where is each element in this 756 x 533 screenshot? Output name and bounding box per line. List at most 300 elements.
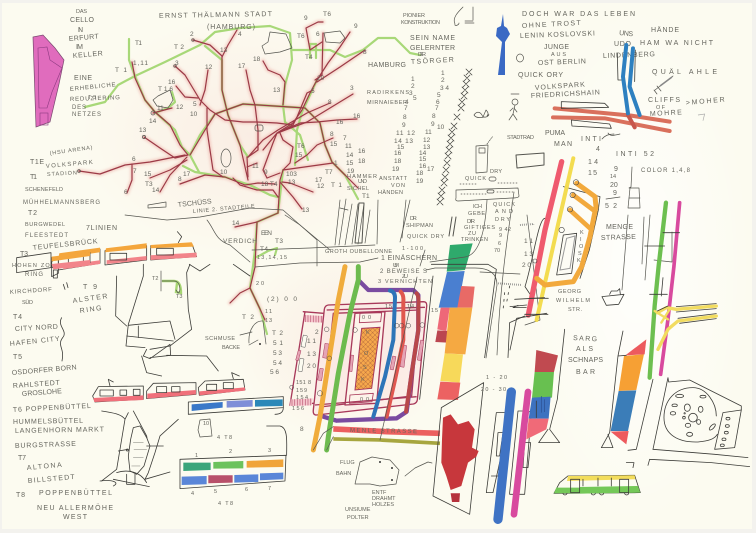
text: quick and dry: AND bbox=[495, 209, 513, 215]
text: tschüss linie bbox=[177, 197, 255, 215]
station labels: 159 bbox=[296, 388, 307, 394]
number columns: 5 bbox=[437, 92, 441, 99]
text: puma man inti: 4 bbox=[596, 146, 600, 153]
text: eine erhebliche reduzierung: ERHEBLICHE bbox=[70, 82, 116, 93]
number columns: 19 bbox=[416, 178, 424, 185]
button numbers: 6 bbox=[245, 487, 248, 493]
map labels: 13 bbox=[288, 179, 296, 186]
text: puma man inti: INTI 52 bbox=[616, 151, 654, 158]
diagram: river with bridges bbox=[100, 411, 178, 487]
map labels: T6 bbox=[297, 143, 305, 150]
panel: seven coloured buttons bbox=[180, 426, 287, 489]
text: stations t1 t2: 7LINIEN bbox=[86, 225, 117, 232]
text: eine erhebliche reduzierung: NETZES bbox=[72, 112, 101, 118]
map labels: 11 bbox=[252, 163, 259, 170]
lower right: green magenta with yellow roads bbox=[645, 203, 716, 378]
text: das cello: IN bbox=[78, 27, 83, 34]
map labels: 18 bbox=[358, 158, 366, 165]
text: stations t1 t2: T1E bbox=[30, 159, 44, 166]
labels: t2 station numbers: 13 bbox=[265, 318, 272, 324]
station labels: K bbox=[366, 330, 370, 336]
text: stations t4 to t8: KIRCHDORF bbox=[10, 287, 52, 296]
station labels: 2 bbox=[315, 329, 319, 336]
text: das cello: CELLO bbox=[70, 17, 95, 24]
side platform bbox=[290, 312, 323, 406]
text: stations t1 t2: (HSU ARENA) bbox=[49, 145, 93, 157]
pink frame bbox=[313, 302, 427, 415]
text: das cello: IM bbox=[76, 44, 83, 51]
number columns: 3 4 bbox=[440, 85, 449, 92]
text: stations t4 to t8: ALTONA bbox=[27, 462, 62, 472]
map labels: 16 bbox=[353, 113, 361, 120]
diagram: hatched track bbox=[335, 199, 406, 245]
station labels: 0 0 bbox=[360, 397, 369, 403]
text: quick and dry: TRINKEN bbox=[461, 237, 488, 243]
text: groth oubellonne: 1-100 bbox=[402, 246, 423, 252]
map labels: T2 bbox=[174, 44, 184, 51]
text: eine erhebliche reduzierung: T3 bbox=[88, 95, 96, 101]
text: doch war das leben: FRIEDRICHSHAIN bbox=[531, 89, 600, 100]
road outlines bbox=[125, 208, 378, 267]
text: stations t4 to t8: BURGSTRASSE bbox=[15, 441, 76, 450]
text: stations t4 to t8: GROSLOHE bbox=[22, 388, 62, 398]
text: groth oubellonne: 2 BEWEISE S bbox=[380, 269, 427, 275]
icon: ship bbox=[602, 289, 624, 305]
text: groth oubellonne: 1 EINÄSCHERN bbox=[381, 254, 437, 262]
map labels: 18 T4 bbox=[261, 181, 278, 188]
number columns: 4 bbox=[405, 99, 409, 106]
map labels: 8 bbox=[363, 49, 367, 56]
labels: t2 station numbers: T3 bbox=[275, 238, 283, 245]
text: stations t1 t2: T1 bbox=[30, 174, 37, 181]
plan: flug bahn and ent atelier bbox=[336, 457, 432, 521]
text: groth oubellonne: UM bbox=[393, 263, 399, 269]
map labels: 14 bbox=[149, 118, 157, 125]
text: stations t4 to t8: T7 bbox=[18, 455, 26, 462]
map labels: 12 bbox=[176, 104, 184, 111]
text: hände: HAM WA NICHT bbox=[640, 40, 714, 47]
labels: t2 station numbers: 54 bbox=[273, 360, 282, 367]
text: stations t1 t2 bbox=[12, 145, 117, 278]
pink wash along lines bbox=[79, 22, 365, 320]
text: stations t1 t2: RING bbox=[25, 272, 43, 278]
text: puma man inti bbox=[507, 130, 691, 242]
text: sein name gelernter bbox=[401, 13, 455, 66]
map labels: 13 bbox=[220, 47, 228, 54]
blue and magenta strips bbox=[486, 392, 531, 519]
number columns: 1 bbox=[441, 70, 445, 77]
map labels: 14 bbox=[232, 220, 240, 227]
text: quick and dry bbox=[406, 169, 515, 254]
icon: tool sketches bbox=[454, 7, 474, 26]
title bbox=[159, 10, 273, 31]
map labels: 16 bbox=[358, 148, 366, 155]
text: hände: >MOHER bbox=[686, 97, 725, 107]
text: sein name gelernter: PIONIER bbox=[403, 13, 425, 19]
icon: green t2 t3 branch: T3 bbox=[176, 294, 182, 300]
text: sarg als schnaps bar: ALS bbox=[576, 346, 593, 353]
text: puma man inti: MAN bbox=[554, 141, 572, 148]
map labels: 17 bbox=[315, 177, 323, 184]
text: doch war das leben: LENIN KOSLOVSKI bbox=[520, 30, 595, 40]
text: eine erhebliche reduzierung bbox=[70, 75, 120, 118]
text: sarg als schnaps bar: SARG bbox=[573, 335, 597, 343]
label: schmuse backe bbox=[205, 321, 266, 351]
station labels: 20 bbox=[307, 363, 316, 370]
station labels: 15 bbox=[385, 304, 392, 310]
map labels: 8 bbox=[178, 176, 182, 183]
text: puma man inti: INTI bbox=[581, 136, 601, 143]
labels near kiosk: 13 bbox=[524, 251, 533, 258]
station labels: 11 bbox=[307, 338, 316, 345]
text: quick and dry: 70 bbox=[494, 248, 500, 254]
diagram: roundabout park bbox=[626, 378, 750, 468]
map labels: 1 bbox=[334, 160, 338, 167]
map labels: T1 bbox=[135, 40, 142, 47]
text: hände: UDO bbox=[614, 41, 632, 48]
text: puma man inti: STADTRAD bbox=[507, 135, 534, 141]
number columns: 9 bbox=[431, 121, 435, 128]
labels near kiosk bbox=[522, 230, 590, 313]
text: quick and dry: QUICK bbox=[465, 176, 486, 182]
title: ERNST THÄLMANN STADT bbox=[159, 10, 273, 20]
text: hände: UNS bbox=[619, 30, 634, 38]
text: quick and dry: ICH bbox=[473, 204, 482, 210]
map labels: 8 bbox=[328, 99, 332, 106]
text: stations t4 to t8: OSDORFER BORN bbox=[12, 364, 77, 377]
station labels: 151 8 bbox=[296, 380, 311, 386]
text: stations t1 t2: FLEESTEDT bbox=[25, 233, 68, 239]
plan: flug bahn and ent atelier: UNSIUME bbox=[345, 507, 371, 513]
map labels: T1 bbox=[331, 182, 342, 189]
text: hamburg column: ANSTATT bbox=[379, 176, 408, 182]
text: doch war das leben: JUNGE bbox=[544, 44, 569, 51]
text: eine erhebliche reduzierung: DES bbox=[72, 105, 86, 111]
number columns: 2 bbox=[441, 77, 445, 84]
text: groth oubellonne bbox=[325, 246, 437, 285]
label: schmuse backe: BACKE bbox=[222, 345, 240, 351]
number columns: 6 bbox=[436, 99, 440, 106]
icon: pink building plan bbox=[33, 35, 64, 127]
text: stations t1 t2: SCHENEFELD bbox=[25, 187, 63, 193]
map labels: 13 bbox=[302, 207, 310, 214]
text: das cello: DAS bbox=[76, 9, 87, 15]
text: stations t4 to t8: LANGENHORN MARKT bbox=[15, 426, 105, 435]
number columns: 10 bbox=[437, 124, 445, 131]
text: sarg als schnaps bar: BAR bbox=[576, 369, 595, 376]
number columns: 7 bbox=[435, 105, 439, 112]
label: 10 and 4 t8: 4 T8 bbox=[218, 501, 233, 507]
text: hamburg column: RADIRKENS bbox=[367, 90, 409, 96]
text: quick and dry: 9 42 bbox=[499, 227, 511, 233]
icon: color box station bbox=[622, 167, 672, 290]
text: sein name gelernter: KONSTRUKTION bbox=[401, 20, 440, 26]
map labels: T16 bbox=[158, 86, 173, 93]
text: stations t4 to t8: HAFEN CITY bbox=[9, 336, 60, 348]
number columns: 7 bbox=[404, 105, 408, 112]
map labels: 13 bbox=[273, 87, 281, 94]
text: sarg als schnaps bar: SCHNAPS bbox=[568, 357, 603, 364]
number columns: 5 bbox=[413, 95, 417, 102]
text: doch war das leben: VOLKSPARK bbox=[535, 82, 585, 92]
map labels: 14 bbox=[346, 152, 354, 159]
button numbers bbox=[191, 448, 271, 497]
text: stations t1 t2: TEUFELSBRÜCK bbox=[32, 237, 98, 252]
illustration: green train bbox=[554, 475, 640, 495]
text: doch war das leben: OST BERLIN bbox=[538, 58, 586, 67]
labels: t2 station numbers: 53 bbox=[273, 350, 282, 357]
text: quick and dry: DIR bbox=[467, 219, 475, 225]
text: stations t4 to t8: T8 bbox=[16, 492, 25, 499]
labels: t2 station numbers: VERDICH bbox=[223, 238, 257, 245]
number columns: 15 bbox=[397, 144, 405, 151]
text: hamburg column: HÄNDEN bbox=[378, 189, 403, 196]
button numbers: 1 bbox=[195, 453, 198, 459]
button numbers: 2 bbox=[229, 449, 232, 455]
number columns: 11 bbox=[425, 129, 432, 136]
map labels: 3 bbox=[350, 85, 354, 92]
labels near kiosk: O bbox=[579, 244, 584, 250]
colour blocks: sarg stack bbox=[526, 329, 565, 443]
pink platforms bbox=[318, 340, 424, 381]
text: quick and dry: QUICK bbox=[493, 202, 515, 208]
label: 10 and 4 t8: 10 bbox=[203, 421, 209, 427]
labels: t2 station numbers: T2 bbox=[242, 314, 254, 321]
map labels: 10 bbox=[220, 169, 228, 176]
labels near kiosk: S bbox=[578, 251, 582, 257]
labels near kiosk: 20 bbox=[522, 262, 531, 269]
text: quick and dry: GEBE bbox=[468, 211, 485, 217]
labels: t2 station numbers: T4 bbox=[260, 246, 268, 253]
text: das cello bbox=[69, 9, 103, 60]
station labels: 14 bbox=[407, 304, 414, 310]
labels near kiosk: STR. bbox=[568, 307, 582, 313]
text: stations t1 t2: STADION bbox=[47, 170, 77, 178]
text: hamburg column: MIRNAIEBER bbox=[367, 100, 407, 106]
text: puma man inti: 5 2 bbox=[605, 203, 617, 210]
text: stations t4 to t8: POPPENBÜTTEL bbox=[39, 489, 112, 497]
text: quick and dry: ZU bbox=[468, 231, 476, 237]
text: quick and dry: 6 bbox=[498, 241, 501, 247]
icon: quäl ahle tool bbox=[654, 76, 673, 94]
text: stations t4 to t8: T5 bbox=[13, 354, 22, 361]
button numbers: 3 bbox=[268, 448, 271, 454]
map labels: T3 bbox=[145, 181, 153, 188]
text: groth oubellonne: ZU bbox=[402, 274, 408, 280]
text: quick and dry: DR. bbox=[410, 216, 417, 222]
number columns: 11 12 bbox=[396, 130, 415, 137]
station dots and thin outlines of parks bbox=[78, 31, 345, 208]
label: 1-20 20-30: 1 - 20 bbox=[486, 375, 507, 381]
labels: t2 station numbers: (2) 0 0 bbox=[267, 296, 297, 303]
circled stations bbox=[317, 323, 425, 396]
map labels: 14 bbox=[152, 187, 160, 194]
map labels: 1,11 bbox=[133, 60, 148, 67]
text: quick and dry: GIFTIGES bbox=[464, 225, 495, 231]
number columns: 2 bbox=[411, 83, 415, 90]
labels: t2 station numbers: 56 bbox=[270, 369, 279, 376]
text: hamburg column: SICHEL bbox=[347, 186, 369, 192]
icon: green t2 t3 branch bbox=[152, 271, 182, 300]
text: puma man inti: 14 bbox=[610, 174, 616, 180]
text: tschüss linie: LINIE 2. STADTEILE bbox=[193, 204, 255, 215]
labels: t2 station numbers: 51 bbox=[273, 340, 283, 347]
title: (HAMBURG) bbox=[207, 24, 255, 31]
labels near kiosk: K bbox=[577, 258, 581, 264]
map labels: T7 bbox=[325, 169, 333, 176]
map labels: 2 bbox=[190, 31, 194, 38]
icon: sign board bbox=[449, 136, 544, 236]
map labels: 16 bbox=[336, 119, 344, 126]
map labels: 11 bbox=[157, 105, 164, 112]
map labels: 9 bbox=[264, 169, 268, 176]
text: puma man inti: COLOR 1,4,8 bbox=[641, 168, 691, 174]
text: stations t4 to t8: NEU ALLERMÖHE bbox=[37, 504, 113, 512]
icon: green t2 t3 branch: T2 bbox=[152, 276, 158, 282]
number columns: 9 bbox=[402, 122, 406, 129]
text: puma man inti: MENGE bbox=[606, 224, 633, 231]
map labels: 6 bbox=[132, 156, 136, 163]
station labels bbox=[292, 304, 438, 433]
plan: flug bahn and ent atelier: ENTF bbox=[372, 490, 387, 496]
map labels: 103 bbox=[286, 171, 297, 178]
map labels: 9 bbox=[354, 23, 358, 30]
button numbers: 7 bbox=[268, 486, 271, 492]
map labels: 9 bbox=[304, 15, 308, 22]
text: hamburg column: VON bbox=[391, 183, 405, 189]
number columns: 16 bbox=[394, 150, 402, 157]
text: stations t4 to t8: ALSTER bbox=[72, 293, 108, 305]
thin street lines centre right bbox=[380, 192, 540, 440]
text: stations t4 to t8: T4 bbox=[13, 314, 22, 321]
text: eine erhebliche reduzierung: REDUZIERING bbox=[70, 95, 120, 103]
text: stations t1 t2: MÜHHELMANNSBERG bbox=[23, 199, 100, 206]
text: stations t4 to t8: WEST bbox=[63, 514, 88, 521]
text: stations t1 t2: HOHEN ZOL bbox=[12, 263, 54, 269]
small icons: egg and lotus bbox=[474, 54, 524, 120]
text: hamburg column: HAMBURG bbox=[368, 62, 406, 69]
number columns: 8 bbox=[403, 114, 407, 121]
text: doch war das leben: DOCH WAR DAS LEBEN bbox=[522, 11, 635, 18]
label: 10 and 4 t8: 4 T8 bbox=[217, 435, 232, 441]
labels near kiosk: WILHELM bbox=[556, 298, 590, 304]
network map: transit lines bbox=[79, 22, 420, 334]
number columns: 18 bbox=[416, 170, 424, 177]
number columns: 14 13 bbox=[394, 138, 413, 145]
text: stations t4 to t8: SÜD bbox=[22, 299, 33, 306]
text: puma man inti: STRASSE bbox=[601, 234, 636, 242]
station labels: K bbox=[361, 377, 365, 383]
plan: flug bahn and ent atelier: POLTER bbox=[347, 515, 369, 521]
number columns: 16 bbox=[419, 163, 427, 170]
map labels: 7 bbox=[343, 135, 347, 142]
map labels: 12 bbox=[205, 64, 213, 71]
text: puma man inti: 15 bbox=[588, 170, 597, 177]
map labels: T6 bbox=[297, 33, 305, 40]
map labels: 15 bbox=[144, 171, 152, 178]
button numbers: 4 bbox=[191, 491, 194, 497]
text: eine erhebliche reduzierung: EINE bbox=[74, 75, 92, 82]
text: hände: HÄNDE bbox=[651, 26, 679, 34]
map labels: 15 bbox=[295, 152, 303, 159]
map labels: 17 bbox=[238, 63, 246, 70]
text: puma man inti: 9 bbox=[614, 166, 618, 173]
text: sein name gelernter: TSÖRGER bbox=[411, 56, 454, 66]
text: puma man inti: PUMA bbox=[545, 130, 565, 137]
kiosk rectangle bbox=[355, 327, 380, 390]
map labels: 4 bbox=[238, 31, 242, 38]
colour blocks: centre stack bbox=[435, 243, 475, 400]
station labels: O bbox=[364, 351, 369, 357]
labels near kiosk: 11 bbox=[524, 238, 533, 245]
label: 10 and 4 t8 bbox=[198, 419, 233, 507]
text: doch war das leben: QUICK ORY bbox=[518, 72, 563, 79]
labels: t2 station numbers: 11 bbox=[265, 309, 272, 315]
text: stations t4 to t8: RAHLSTEDT bbox=[13, 380, 61, 390]
labels: t2 station numbers: EEN bbox=[261, 230, 272, 237]
number columns: 14 bbox=[419, 150, 427, 157]
text: stations t1 t2: T2 bbox=[28, 210, 37, 217]
station labels: 154 bbox=[296, 395, 308, 401]
text: stations t4 to t8: BILLSTEDT bbox=[28, 474, 76, 485]
text: doch war das leben: OHNE TROST bbox=[522, 20, 582, 30]
map labels bbox=[115, 11, 370, 227]
map labels: T1 bbox=[362, 193, 370, 200]
text: doch war das leben bbox=[518, 11, 635, 100]
text: hamburg column: HAMMER bbox=[347, 174, 377, 180]
plan: flug bahn and ent atelier: DRAHMT bbox=[372, 496, 396, 502]
illustration: red trains bbox=[93, 373, 245, 402]
text: quick and dry: DRY bbox=[490, 169, 502, 175]
map labels: 10 bbox=[190, 111, 198, 118]
map labels: 6 bbox=[124, 189, 128, 196]
colour blocks: right stack bbox=[601, 331, 646, 448]
map labels: 16 bbox=[168, 79, 176, 86]
text: stations t1 t2: VOLKSPARK bbox=[46, 160, 93, 170]
number columns: 19 bbox=[392, 166, 400, 173]
map labels: 3 bbox=[175, 60, 179, 67]
text: stations t4 to t8: RING bbox=[79, 305, 102, 315]
cliffs: blue and red lines bbox=[553, 45, 705, 131]
label: 1-20 20-30 bbox=[481, 375, 507, 393]
label: schmuse backe: SCHMUSE bbox=[205, 336, 235, 342]
panel: three blue buttons bbox=[188, 397, 283, 414]
text: hände: OF bbox=[656, 105, 666, 111]
text: stations t4 to t8: T6 POPPENBÜTTEL bbox=[13, 402, 91, 414]
text: hände: LINDENBERG bbox=[603, 51, 655, 60]
map labels: 17 bbox=[183, 171, 191, 178]
map labels: 11 bbox=[345, 143, 352, 150]
map labels: T4 bbox=[305, 54, 313, 61]
text: stations t1 t2: BURGWEDEL bbox=[25, 222, 65, 228]
plan: flug bahn and ent atelier: HOLZES bbox=[372, 502, 394, 508]
text: hamburg column bbox=[347, 62, 409, 196]
text: puma man inti: 20 bbox=[610, 182, 618, 189]
number columns bbox=[392, 70, 449, 185]
text: puma man inti: 9 bbox=[613, 190, 617, 197]
text: das cello: KELLER bbox=[73, 50, 103, 60]
number columns: 18 bbox=[394, 158, 402, 165]
text: sein name gelernter: DER bbox=[418, 52, 426, 58]
number columns: 1 bbox=[411, 76, 415, 83]
map labels: 13 bbox=[139, 127, 147, 134]
text: hände bbox=[603, 26, 725, 118]
labels: t2 station numbers: 13,14,15 bbox=[257, 255, 287, 261]
street name: menle strasse: MENLE STRASSE bbox=[350, 428, 417, 435]
text: stations t1 t2: T3 bbox=[20, 251, 28, 258]
number columns: 17 bbox=[427, 166, 435, 173]
labels near kiosk: K bbox=[580, 230, 584, 236]
